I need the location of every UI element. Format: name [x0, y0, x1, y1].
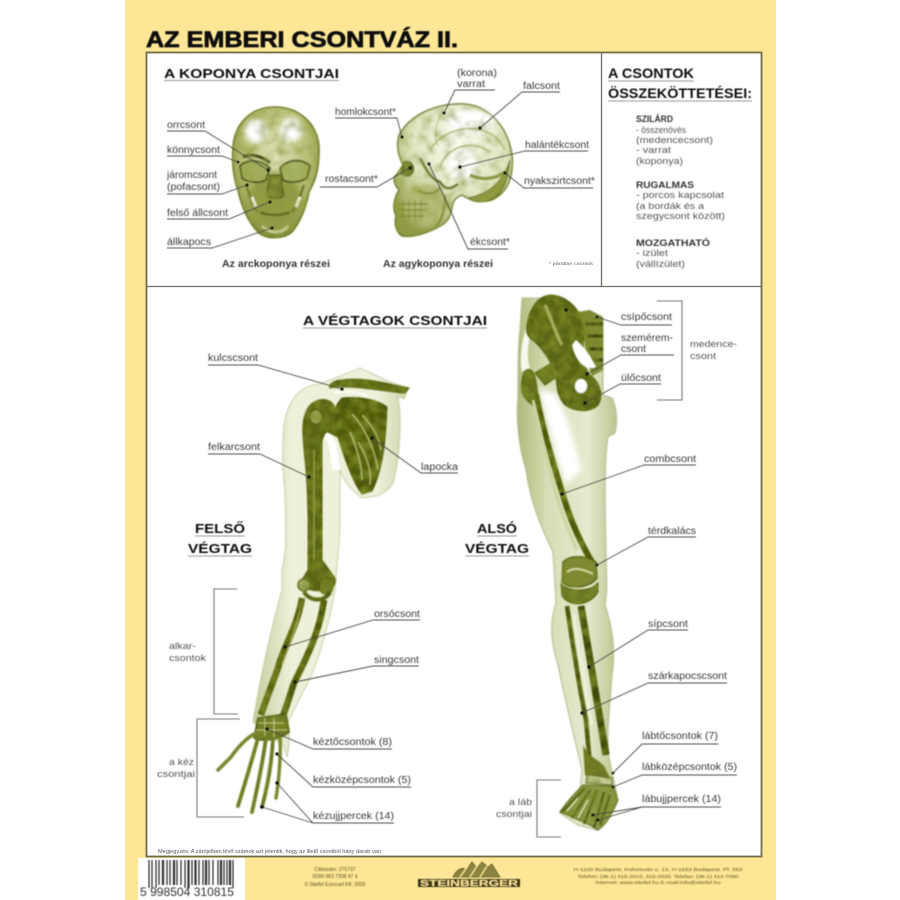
imprint: contact data: Internet: www.stiefel.hu E-mail:info@stiefel.hu	[596, 880, 721, 886]
bracket: hand bones: csontjai	[157, 769, 195, 780]
label: lapocka	[370, 436, 458, 473]
imprint: contact data	[574, 867, 743, 886]
label: sípcsont: sípcsont	[648, 619, 688, 630]
label: orsócsont	[283, 609, 420, 649]
label: kéztőcsontok: kéztőcsontok (8)	[313, 737, 392, 748]
label: ékcsont: ékcsont*	[470, 237, 510, 248]
label: lábtőcsontok	[612, 731, 718, 774]
caption: side skull: Az agykoponya részei	[383, 259, 493, 270]
label: szárkapocscsont: szárkapocscsont	[648, 671, 727, 682]
label: korona varrat	[442, 68, 497, 114]
label: nyakszirtcsont: nyakszirtcsont*	[524, 176, 595, 187]
text block: flexible joints: RUGALMAS	[636, 180, 694, 191]
bracket: hand bones	[157, 719, 244, 817]
text block: fixed joints: - összenövés	[636, 125, 686, 136]
label: singcsont	[293, 655, 419, 684]
illustration: front skull	[233, 107, 319, 238]
heading: bone connections	[608, 66, 752, 101]
text block: movable joints: (vállízület)	[636, 259, 685, 270]
bracket: forearm bones: alkar-	[169, 641, 196, 652]
text block: fixed joints: SZILÁRD	[636, 114, 673, 125]
heading: upper limb: VÉGTAG	[188, 541, 252, 556]
label: nyakszirtcsont	[504, 172, 595, 188]
label: szeméremcsont: csont	[621, 344, 646, 355]
text block: fixed joints	[636, 114, 713, 167]
text block: movable joints	[636, 237, 710, 270]
heading: lower limb: ALSÓ	[477, 521, 517, 536]
imprint: publication data: Cikkszám: 275737	[314, 867, 356, 873]
label: singcsont: singcsont	[374, 655, 419, 666]
label: kézujjpercek: kézujjpercek (14)	[313, 811, 394, 822]
label: állkapocs: állkapocs	[167, 237, 211, 248]
illustration: arm skeleton	[218, 368, 409, 812]
bracket: forearm bones	[169, 589, 238, 714]
label: felkarcsont: felkarcsont	[208, 442, 260, 453]
footnote: unpaired bones: * páratlan csontok	[549, 261, 594, 266]
bracket: foot bones: csontjai	[496, 809, 532, 820]
bracket: forearm bones: csontok	[169, 653, 206, 664]
text block: fixed joints: - varrat	[636, 145, 671, 156]
label: térdkalács: térdkalács	[648, 526, 696, 537]
label: homlokcsont: homlokcsont*	[335, 107, 396, 118]
label: lapocka: lapocka	[421, 462, 458, 473]
label: állkapocs	[167, 226, 274, 248]
label: szárkapocscsont	[580, 671, 727, 715]
label: felső állcsont: felső állcsont	[167, 208, 228, 219]
label: ülőcsont	[583, 373, 661, 405]
label: korona varrat: (korona)	[457, 68, 497, 79]
imprint: contact data: Telefon: (36-1) 415-2010, 415-2020. Telefax: (36-1) 414-7080	[578, 874, 739, 880]
label: ékcsont	[428, 162, 510, 249]
label: kéztőcsontok	[265, 727, 392, 749]
label: kézközépcsontok: kézközépcsontok (5)	[313, 775, 411, 786]
label: kézujjpercek	[260, 781, 394, 823]
label: falcsont: falcsont	[523, 81, 560, 92]
label: felső állcsont	[167, 200, 272, 219]
label: combcsont: combcsont	[644, 454, 696, 465]
label: orrcsont: orrcsont	[167, 120, 205, 131]
label: könnycsont	[167, 145, 239, 163]
label: falcsont	[478, 81, 560, 130]
panel: skull bones	[164, 67, 595, 270]
heading: upper limb	[188, 521, 252, 556]
panel: bone connections	[608, 66, 752, 270]
label: lábujjpercek	[592, 794, 721, 822]
footnote: note: Megjegyzés: A zárójelben lévő számok azt jelentik, hogy az illető csontból hány darab van	[158, 849, 381, 855]
heading: skull bones: A KOPONYA CSONTJAI	[164, 67, 339, 81]
label: orrcsont	[167, 120, 270, 172]
barcode	[138, 858, 245, 900]
label: szeméremcsont: szemérem-	[621, 333, 673, 344]
label: járomcsont: (pofacsont)	[167, 182, 220, 193]
label: könnycsont: könnycsont	[167, 145, 220, 156]
caption: front skull: Az arckoponya részei	[222, 259, 330, 270]
imprint: contact data: H-1100 Budapest, Kolozsvári u. 13. H-1553 Budapest, Pf. 552	[574, 867, 743, 873]
label: felkarcsont	[208, 442, 311, 479]
bracket: pelvis: medence-	[690, 339, 737, 350]
label: térdkalács	[596, 526, 696, 566]
imprint: publication data	[305, 867, 366, 888]
label: korona varrat: varrat	[457, 79, 485, 90]
text block: flexible joints: szegycsont között)	[636, 211, 725, 222]
barcode: 5 998504 310815	[140, 887, 234, 899]
label: kézközépcsontok	[275, 752, 411, 787]
logo: Steinberger: STEINBERGER	[420, 879, 518, 888]
bracket: pelvis: csont	[690, 351, 716, 362]
heading: limb bones: A VÉGTAGOK CSONTJAI	[303, 313, 487, 328]
panel: limb bones	[157, 295, 737, 855]
imprint: publication data: ISSN 963 7308 47 4	[312, 874, 358, 880]
label: járomcsont: járomcsont	[166, 170, 217, 181]
logo: Steinberger	[418, 862, 520, 888]
poster background	[125, 0, 776, 900]
bracket: foot bones: a láb	[509, 797, 532, 808]
text block: flexible joints	[636, 180, 725, 222]
text block: movable joints: MOZGATHATÓ	[636, 237, 710, 249]
illustration: side skull	[394, 104, 512, 236]
label: homlokcsont	[335, 107, 404, 138]
imprint: publication data: © Stiefel Eurocart Kft. 2003	[305, 881, 366, 888]
main white panel	[146, 52, 762, 856]
label: lábközépcsontok: lábközépcsontok (5)	[642, 762, 737, 773]
label: combcsont	[560, 454, 696, 496]
label: sípcsont	[587, 619, 688, 669]
label: lábujjpercek: lábujjpercek (14)	[642, 794, 721, 805]
label: halántékcsont	[458, 140, 589, 169]
bracket: pelvis	[657, 301, 737, 400]
label: szeméremcsont	[585, 333, 674, 376]
label: csípőcsont	[564, 308, 672, 325]
label: csípőcsont: csípőcsont	[621, 312, 672, 323]
text block: fixed joints: (medencecsont)	[636, 135, 713, 146]
label: rostacsont	[320, 166, 412, 187]
heading: lower limb	[465, 521, 529, 556]
label: járomcsont	[166, 170, 248, 194]
text block: flexible joints: - porcos kapcsolat	[636, 190, 724, 201]
heading: bone connections: A CSONTOK	[608, 66, 694, 81]
text block: fixed joints: (koponya)	[636, 156, 683, 167]
label: kulcscsont	[208, 353, 344, 391]
text block: flexible joints: (a bordák és a	[636, 201, 705, 212]
label: lábközépcsontok	[612, 762, 737, 788]
label: ülőcsont: ülőcsont	[621, 373, 661, 384]
heading: upper limb: FELSŐ	[195, 521, 245, 536]
illustration: leg skeleton	[517, 295, 618, 830]
label: lábtőcsontok: lábtőcsontok (7)	[642, 731, 718, 742]
label: rostacsont: rostacsont*	[325, 174, 378, 185]
label: orsócsont: orsócsont	[374, 609, 420, 620]
heading: lower limb: VÉGTAG	[465, 541, 529, 556]
label: kulcscsont: kulcscsont	[208, 353, 258, 364]
label: halántékcsont: halántékcsont	[525, 140, 589, 151]
title: AZ EMBERI CSONTVÁZ II.	[146, 27, 458, 52]
bracket: foot bones	[496, 780, 561, 837]
bracket: hand bones: a kéz	[169, 757, 194, 768]
heading: bone connections: ÖSSZEKÖTTETÉSEI:	[608, 86, 752, 101]
text block: movable joints: - izület	[636, 248, 668, 259]
